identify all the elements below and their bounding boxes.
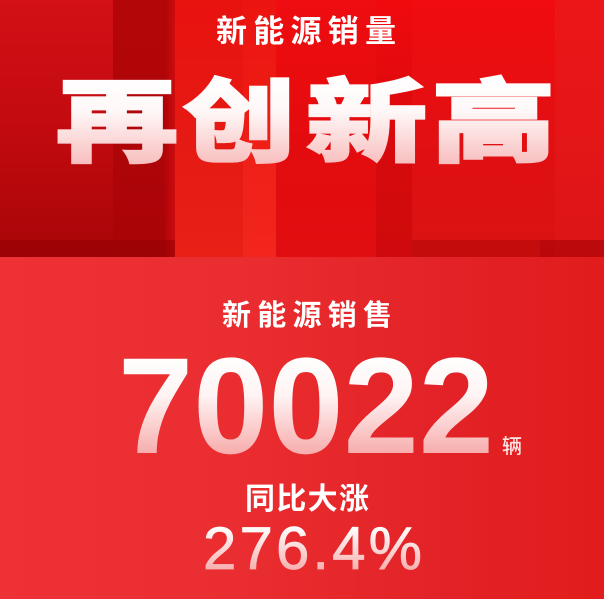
panel: bottom red background — [0, 257, 604, 599]
title: 再创新高: 再 — [56, 50, 178, 181]
label: 同比大涨: 同比大涨 — [245, 474, 369, 518]
title: 再创新高: 新 — [306, 50, 427, 181]
heading: 新能源销售: 新能源销售 — [222, 292, 392, 334]
heading: 新能源销量: 新能源销量 — [216, 6, 396, 51]
big number: 70022: 70022 — [118, 330, 494, 483]
panel: top red striped background — [0, 0, 604, 258]
unit: 辆: 辆 — [502, 430, 522, 459]
title: 再创新高: 高 — [431, 50, 556, 181]
title: 再创新高 — [56, 50, 556, 181]
percentage: 276.4%: 276.4% — [203, 515, 422, 582]
title: 再创新高: 创 — [183, 50, 295, 181]
